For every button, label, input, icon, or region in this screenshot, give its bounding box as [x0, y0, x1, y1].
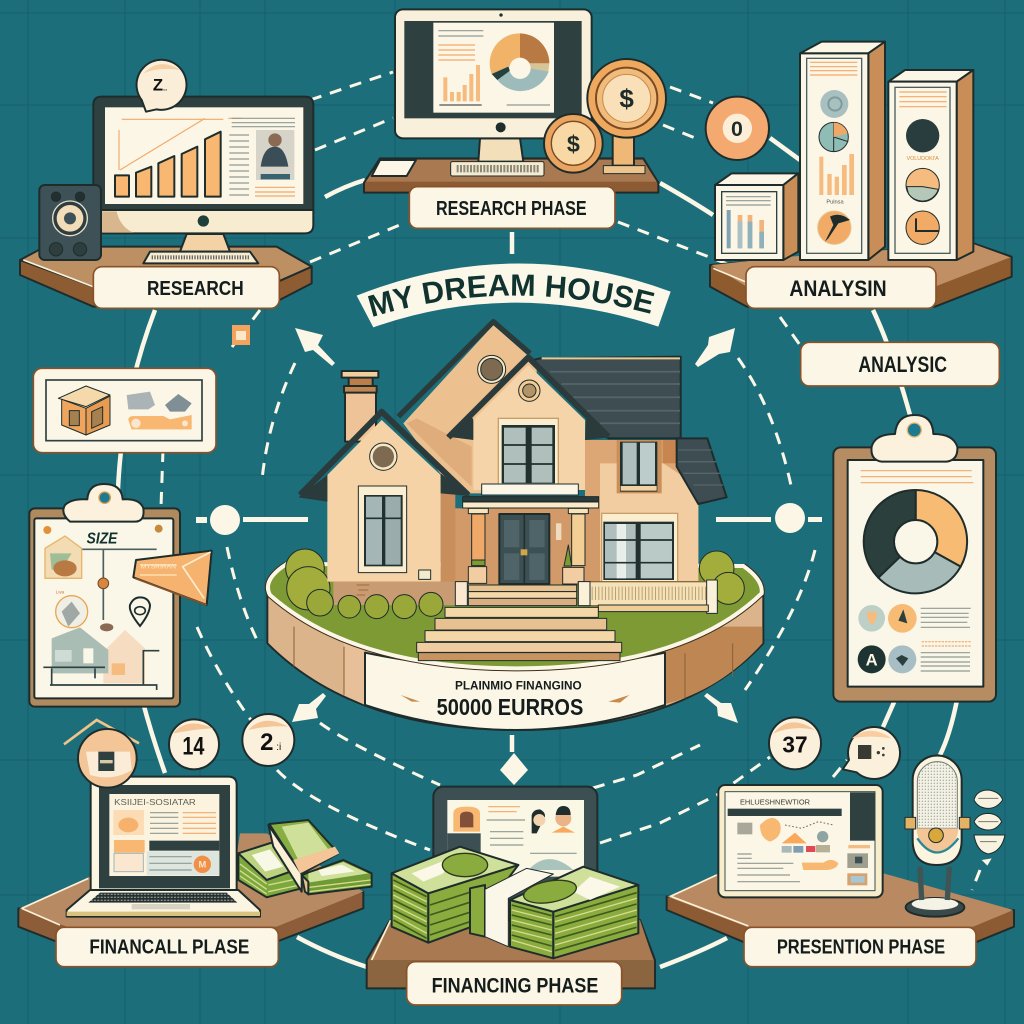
clipboard clip [871, 415, 957, 462]
label: research phase [409, 187, 615, 228]
arrow tag [133, 551, 212, 605]
icon: small orange tag [232, 325, 250, 345]
balcony and porch roof [463, 484, 599, 508]
left gable wing [298, 412, 470, 605]
icon: number circle: 0 [731, 117, 743, 141]
panel: analysis clipboard [833, 415, 996, 702]
panel: left info card [33, 368, 216, 453]
icon: money stack left [392, 847, 518, 943]
lawn [268, 564, 762, 668]
heading: size: SIZE [87, 530, 118, 547]
platform caption [401, 678, 629, 720]
label: financing phase [407, 962, 622, 1005]
label: financing phase: FINANCING PHASE [432, 974, 598, 998]
report box: right: VOLUDOKI'A [907, 156, 939, 162]
panel: house on circular platform [267, 322, 763, 730]
icon: open box [58, 386, 110, 435]
step bubble: Z.. [153, 76, 167, 95]
vents [478, 355, 540, 401]
lower right window [602, 513, 678, 582]
arrow: bottom diamond [500, 753, 528, 785]
donut chart [864, 490, 967, 593]
diagram [43, 525, 163, 631]
heading lines [861, 471, 973, 483]
front shrubs [307, 589, 443, 619]
back gable [403, 325, 537, 493]
icon: speaker [39, 185, 101, 260]
clipboard board [29, 508, 180, 707]
report box: tall [800, 42, 885, 260]
pie chart [490, 33, 550, 105]
label: financall plase: FINANCALL PLASE [89, 936, 249, 958]
porch columns [468, 508, 588, 584]
node: right circle [716, 503, 822, 533]
porch railing [455, 580, 717, 613]
trend lines [119, 118, 223, 170]
desk [710, 243, 1012, 307]
icon: coin trophy [587, 59, 666, 174]
text lines and photo [228, 118, 295, 196]
gable window [498, 418, 558, 485]
front gable [447, 357, 609, 490]
label: financall plase [56, 927, 278, 967]
desk [364, 158, 658, 193]
step circle 37 [769, 717, 821, 769]
panel: research phase desk [364, 9, 666, 228]
step bubble [843, 727, 900, 779]
report box: right [888, 70, 973, 260]
label: analysic [801, 342, 999, 386]
front door [499, 514, 561, 584]
platform caption: 50000 EURROS [437, 694, 583, 720]
icon: house bubble [64, 720, 139, 788]
step circle 2 [242, 714, 294, 766]
clipboard clip [63, 484, 144, 522]
report box: small [715, 173, 798, 260]
monitor [395, 9, 592, 162]
bar chart [115, 132, 221, 197]
icon: coin trophy: $ [619, 83, 634, 113]
right wing wall [585, 440, 698, 583]
platform caption: PLAINMIO FINANGINO [455, 678, 582, 692]
step circle 37: 37 [782, 732, 808, 758]
panel: research desk [20, 60, 313, 308]
icon: coin [544, 114, 603, 173]
desk [18, 833, 363, 942]
node: left circle [196, 505, 308, 535]
label: research: RESEARCH [147, 277, 244, 300]
icon: money stack right [510, 867, 638, 958]
legend icons: A [866, 650, 878, 669]
mic labels [974, 790, 1005, 866]
laptop document [113, 798, 219, 875]
panel: analysis desk [706, 42, 1012, 386]
step circle 14 [169, 719, 219, 769]
wall behind porch [455, 508, 600, 584]
desk [20, 247, 312, 307]
arrow: top left [295, 328, 335, 366]
step circle 14: 14 [182, 733, 205, 760]
label: presention phase: PRESENTION PHASE [777, 936, 945, 958]
clipboard board [833, 447, 996, 702]
label: analysic: ANALYSIC [858, 352, 947, 377]
icon: coin: $ [567, 131, 580, 157]
keyboard [451, 162, 544, 176]
clipboard paper [848, 460, 983, 687]
arrow: bottom left [292, 693, 326, 722]
small side roof [677, 438, 727, 504]
clipboard paper [34, 518, 173, 698]
panel: financial phase desk [18, 714, 372, 967]
title: MY DREAM HOUSE [368, 274, 654, 317]
arrow: top right [695, 328, 735, 367]
desk [367, 920, 655, 988]
icon: small houses [127, 392, 192, 429]
laptop [67, 777, 260, 917]
bar chart [439, 65, 482, 105]
keyboard [143, 252, 258, 263]
laptop document: M [198, 860, 206, 870]
desk [667, 873, 1014, 943]
diagram: Lwa [56, 589, 65, 594]
mouse pad [372, 160, 416, 176]
panel: financing phase desk [367, 787, 655, 1005]
connecting paths [117, 72, 980, 967]
monitor [93, 97, 313, 252]
arrow: bottom right [704, 693, 738, 723]
screen [718, 785, 883, 897]
label: analysin [746, 267, 936, 308]
entrance steps [417, 585, 622, 661]
icon: microphone [905, 755, 970, 917]
label: research [93, 267, 279, 308]
label: presention phase [744, 927, 976, 967]
report box: tall: Pulnsa [826, 200, 844, 206]
upper right window [620, 442, 657, 492]
icon: number circle [706, 97, 769, 160]
screen: EHLUESHNEWTIOR [740, 797, 810, 806]
laptop document: KSIIJEI-SOSIATAR [114, 798, 196, 807]
legend icons [858, 604, 917, 673]
panel: title banner [356, 264, 671, 328]
panel: left size clipboard [29, 484, 212, 707]
arrow tag: MYSRIRAN [141, 563, 176, 570]
panel: presentation phase desk [667, 717, 1014, 967]
platform base [267, 593, 763, 730]
bushes [286, 549, 744, 610]
right roof [533, 357, 681, 438]
icon: money stacks [238, 820, 372, 897]
label: analysin: ANALYSIN [789, 276, 887, 301]
text lines [921, 608, 971, 671]
tablet [433, 787, 597, 920]
label: research phase: RESEARCH PHASE [436, 197, 587, 220]
icon: houses sketch [43, 627, 159, 690]
step bubble [137, 60, 187, 112]
step circle 2: 2 :i [260, 729, 281, 756]
chimney [342, 371, 378, 442]
icon: money stack middle [470, 885, 485, 937]
icon: paper band [485, 868, 553, 947]
